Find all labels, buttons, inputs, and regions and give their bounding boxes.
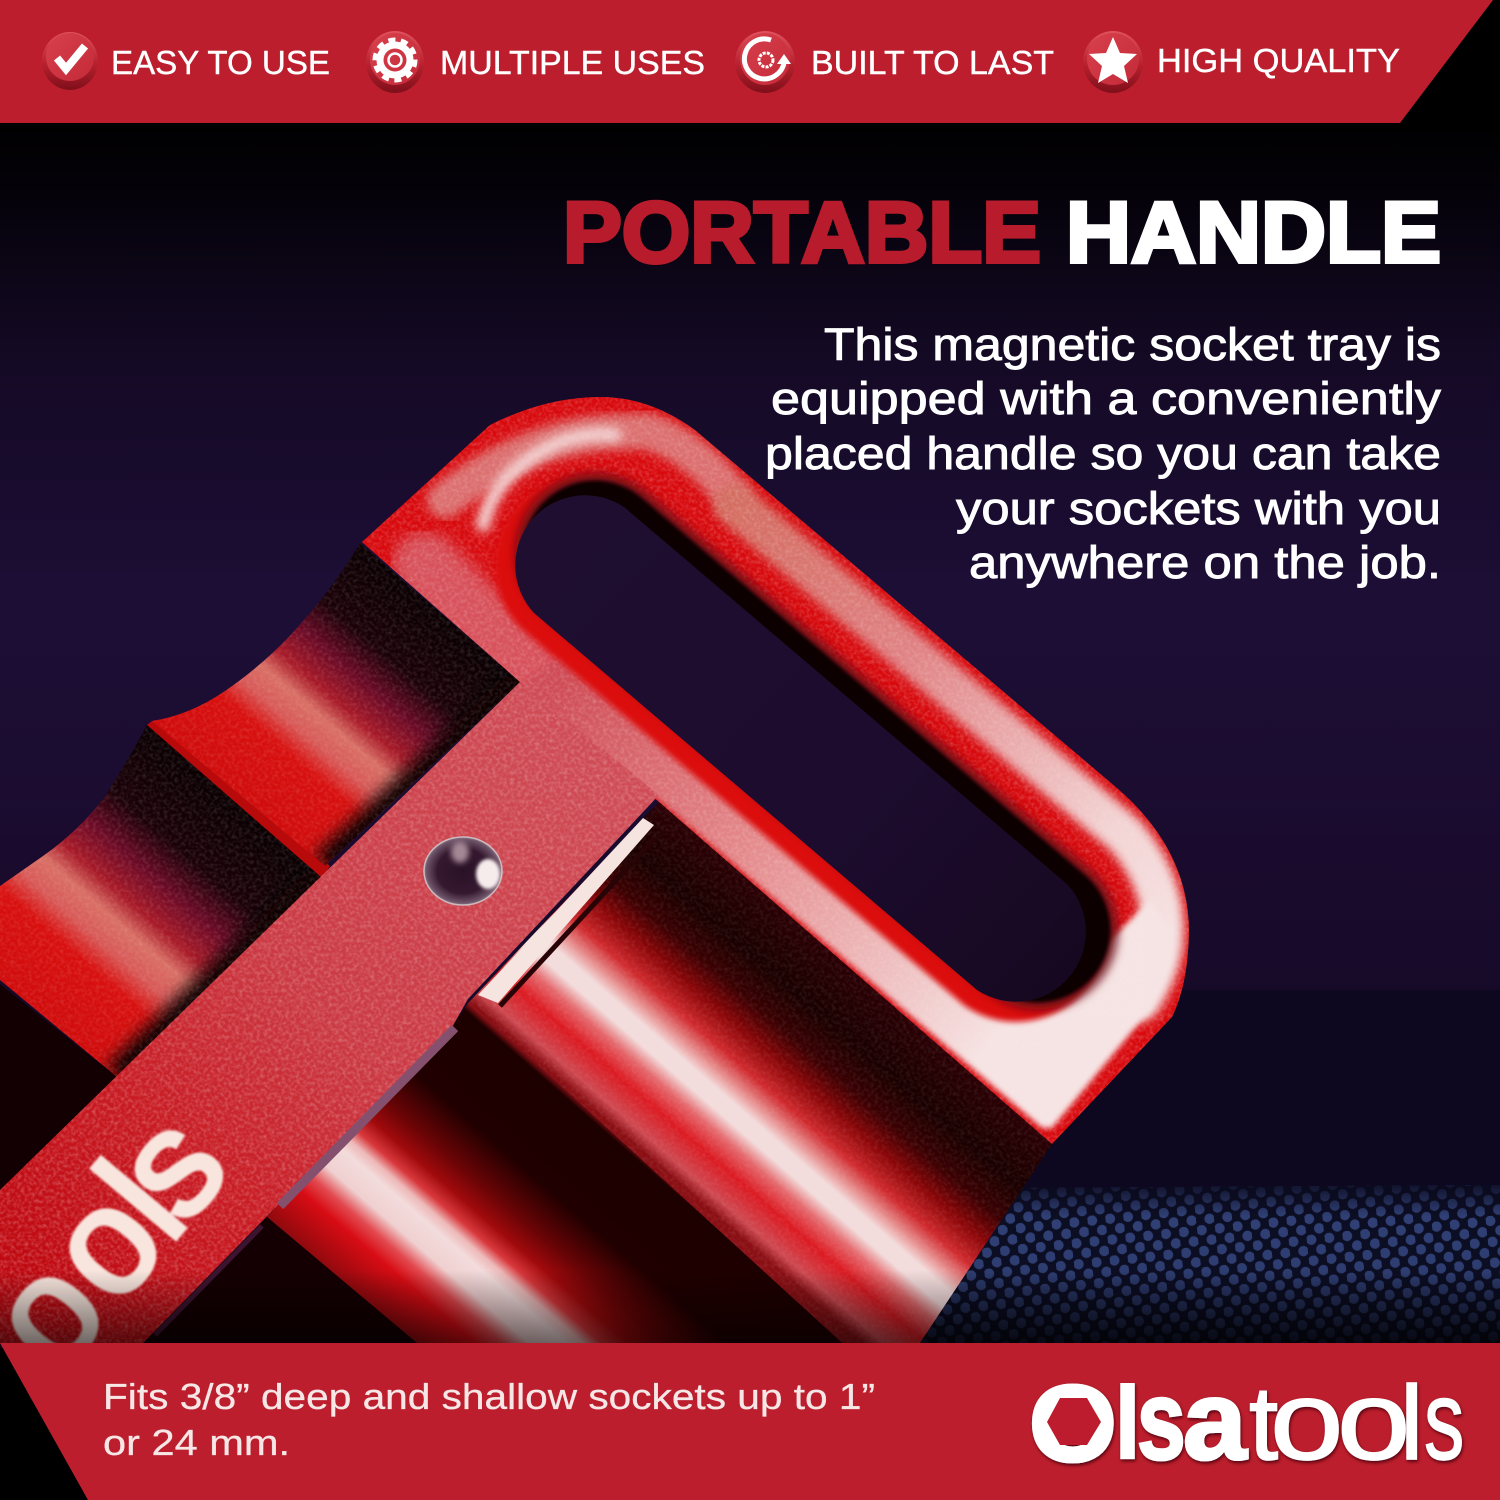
handle body [350,390,1200,1150]
white slit [478,818,654,1003]
logo: Olsatools: o [1270,1358,1343,1483]
badge: high quality [1083,31,1400,93]
logo: Olsatools: s [1424,1358,1464,1483]
feature badges [42,31,1400,93]
purple metal strip [280,1028,455,1206]
cylinder: centre socket channel [267,1002,842,1343]
description text: placed handle so you can take [765,428,1441,479]
heading: PORTABLE [563,185,1041,281]
table edge shadow [1000,990,1500,1190]
description text: anywhere on the job. [969,537,1441,588]
purple sliver by wedge [155,1226,262,1335]
icon: recycle gear [735,31,795,93]
handle opening [515,495,1086,1002]
steel rivet [424,837,502,905]
bottom banner [0,1343,1500,1500]
handle highlights [425,431,1170,1128]
dark wedge under band [143,1217,417,1343]
badge: easy to use [42,32,330,90]
logo: Olsatools: a [1183,1358,1248,1483]
dark wall between pockets [147,721,330,880]
pocket: lower socket rail [0,725,321,1076]
dark line beneath slit [500,838,655,1006]
badge: built to last [735,31,1054,93]
heading: HANDLE [1066,185,1441,281]
handle opening inner wall [523,481,1110,1002]
logo: Olsatools: o [1337,1358,1410,1483]
heading [563,185,1441,281]
description text [765,319,1442,588]
label: easy to use: EASY TO USE [111,44,330,81]
pocket: upper socket rail [152,543,520,866]
top banner [0,0,1493,123]
spec note: Fits 3/8” deep and shallow sockets up to 1” [103,1376,875,1417]
badge: multiple uses [366,31,705,93]
pocket: black left wedge [0,984,117,1192]
icon: star [1083,31,1143,93]
logo: Olsatools: l [1400,1365,1423,1482]
icon: check [42,32,98,90]
product photo: red socket tray with handle [0,390,1200,1398]
bottom vignette [0,1270,1500,1345]
logo: Olsatools: l [1113,1365,1142,1482]
description text: your sockets with you [956,483,1441,534]
description text: equipped with a conveniently [771,373,1442,424]
label: built to last: BUILT TO LAST [811,44,1054,81]
spec note [103,1376,875,1463]
description text: This magnetic socket tray is [824,319,1441,370]
logo: Olsatools: s [1137,1359,1186,1484]
label: high quality: HIGH QUALITY [1157,42,1400,79]
hole outer ring [515,495,1086,1002]
icon: gear [366,31,424,93]
logo: Olsatools: O [1030,1364,1116,1483]
logo: Olsatools: t [1249,1365,1278,1482]
logo: Olsatools [1030,1358,1464,1484]
logo hexagon bolt [1047,1398,1101,1445]
handle opening rust halo [523,481,1110,1002]
spec note: or 24 mm. [103,1422,290,1463]
label: multiple uses: MULTIPLE USES [440,44,705,81]
cylinder: right socket channel [460,800,1060,1345]
riveted band [0,680,670,1350]
textured mat [915,1185,1500,1345]
